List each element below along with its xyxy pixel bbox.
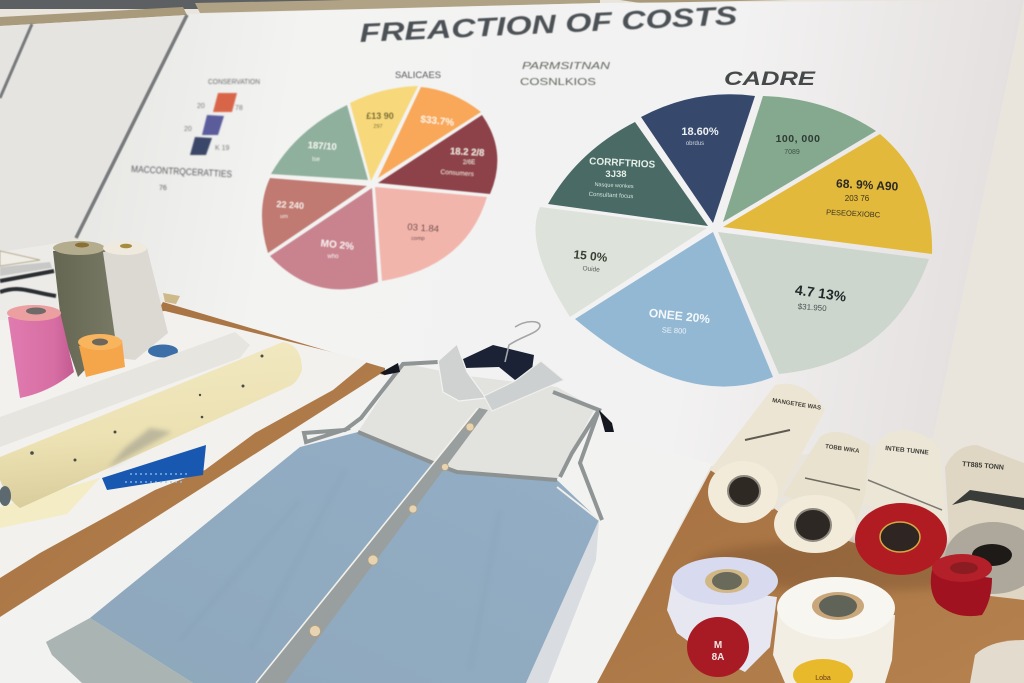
white paper under rolls	[0, 311, 367, 578]
armhole trim	[304, 362, 602, 520]
sheer side panels	[46, 447, 599, 683]
slice: pale left: 15 0%	[573, 247, 608, 265]
roll 2	[774, 432, 870, 553]
legend values: K 19	[215, 145, 230, 152]
legend caption: MACCONTRQCERATTIES	[131, 164, 232, 180]
tablet and dark cable, upper left	[0, 251, 56, 296]
fabric rolls	[0, 332, 302, 508]
buttons	[310, 423, 474, 636]
roll: white speckled	[0, 332, 250, 447]
roll: cream	[0, 342, 302, 508]
slice: green: 7089	[784, 149, 800, 156]
slice: dark teal	[548, 122, 708, 226]
slice: terracotta: um	[280, 214, 288, 220]
slice: yellow: 68. 9% A90	[836, 176, 899, 194]
pie chart: left	[262, 86, 497, 289]
left pie heading: SALICAES	[395, 70, 441, 80]
slice: blue: SE 800	[662, 325, 687, 336]
legend swatches	[190, 93, 237, 155]
slice: green: lse	[312, 157, 320, 163]
legend values: 20	[184, 126, 192, 133]
roll fragment, bottom right	[970, 640, 1024, 683]
slice: blue: ONEE 20%	[648, 306, 711, 326]
white tape roll	[773, 577, 895, 683]
slice: orange	[378, 87, 481, 178]
slice: light pink: comp	[411, 236, 425, 242]
shirt body	[90, 432, 599, 683]
slice: yellow	[350, 86, 418, 181]
legend note: 76	[159, 185, 167, 192]
tag: blue	[102, 445, 206, 490]
hem band	[46, 618, 193, 683]
wooden table	[0, 293, 1024, 683]
slice: green	[723, 96, 876, 222]
red label disc	[687, 617, 749, 677]
small red spool	[931, 554, 992, 616]
right pie subheading: COSNLKIOS	[520, 77, 596, 88]
legend values: 20	[197, 103, 205, 110]
slice: yellow: PESEOEXIOBC	[826, 208, 881, 219]
table surface, upper left	[0, 240, 172, 322]
button: blue	[148, 344, 178, 358]
slice: maroon: Consumers	[440, 169, 475, 178]
slice: rose	[270, 188, 378, 289]
slice: light pink	[375, 187, 487, 281]
slice: yellow: £13 90	[366, 111, 394, 121]
black hanger block	[461, 345, 534, 380]
sleeveless shirt on hanger	[46, 322, 614, 683]
slice: dark teal: 3J38	[605, 169, 627, 180]
slice: yellow	[723, 134, 932, 254]
right pie subheading: PARMSITNAN	[522, 61, 611, 72]
red label disc: 8A	[712, 652, 724, 663]
legend heading: CONSERVATION	[208, 79, 260, 86]
left hanging panels	[0, 15, 187, 255]
roll 2: TOBB WIKA	[825, 444, 860, 455]
roll 1	[708, 384, 825, 523]
lavender tape roll	[667, 557, 778, 672]
table shadow under rolls	[695, 539, 1024, 591]
slice: navy: obrdus	[686, 141, 704, 147]
spool: orange	[78, 334, 125, 377]
fabric folds	[180, 470, 500, 670]
slice: pale green right: 4.7 13%	[794, 282, 848, 305]
strap ends	[380, 363, 614, 432]
slice: blue	[575, 232, 773, 387]
yoke	[358, 363, 595, 480]
poster board	[78, 0, 1024, 466]
yoke seam	[358, 432, 557, 480]
slice: pale left	[535, 207, 707, 317]
slice: yellow: 203 76	[845, 194, 870, 203]
yellow label disc	[793, 659, 853, 683]
slice: rose: MO 2%	[320, 238, 355, 253]
roll 3, red end: INTEB TUNNE	[885, 445, 930, 457]
slice: rose: who	[326, 254, 339, 260]
legend: small stacked bar	[131, 79, 260, 192]
slice: maroon: 2/6E	[463, 160, 475, 166]
slice: maroon: 18.2 2/8	[450, 146, 485, 159]
slice: navy	[641, 94, 755, 223]
legend values: 78	[235, 105, 243, 112]
slice: light pink: 03 1.84	[407, 222, 439, 235]
cone: olive	[53, 241, 118, 377]
slice: terracotta: 22 240	[276, 199, 304, 211]
slice: yellow: 297	[373, 124, 383, 130]
right pie heading: CADRE	[724, 69, 817, 90]
right pie subheading	[520, 61, 611, 88]
slice: pale green right: $31.950	[797, 302, 827, 313]
white mat under shirt	[0, 374, 712, 683]
roll 3, red end	[855, 430, 947, 575]
slice: green: 100, 000	[776, 133, 820, 145]
slice: green	[271, 105, 368, 180]
slice: pale green right	[718, 232, 929, 374]
panel dividers	[0, 15, 187, 238]
slice: dark teal: Nasque wonkes	[594, 182, 634, 190]
slice: pale left: Ouide	[582, 265, 600, 274]
red label disc: M	[714, 640, 722, 651]
slice: maroon	[378, 115, 497, 194]
collar	[438, 344, 564, 411]
slice: dark teal: Consultant focus	[589, 192, 634, 200]
roll 1: MANGETEE WAS	[772, 398, 821, 412]
yellow label disc: Loba	[815, 675, 831, 682]
pie chart: right	[535, 94, 932, 387]
legend values	[184, 103, 243, 152]
top rail and window strip	[0, 0, 790, 26]
button placket	[256, 408, 488, 683]
slice: terracotta	[262, 178, 367, 253]
cone: grey white	[103, 241, 168, 360]
thread cones	[7, 241, 178, 398]
slice: navy: 18.60%	[681, 126, 719, 138]
slice: dark teal: CORRFTRIOS	[589, 156, 656, 171]
cone: pink	[7, 305, 74, 398]
roll 4	[945, 445, 1024, 600]
title: FREACTION OF COSTS	[359, 0, 739, 48]
slice: orange: $33.7%	[420, 114, 455, 129]
printed fabric rolls, right	[667, 384, 1024, 683]
slice: green: 187/10	[307, 140, 337, 153]
hanger hook	[505, 322, 540, 362]
roll 4: TT885 TONN	[962, 461, 1004, 472]
